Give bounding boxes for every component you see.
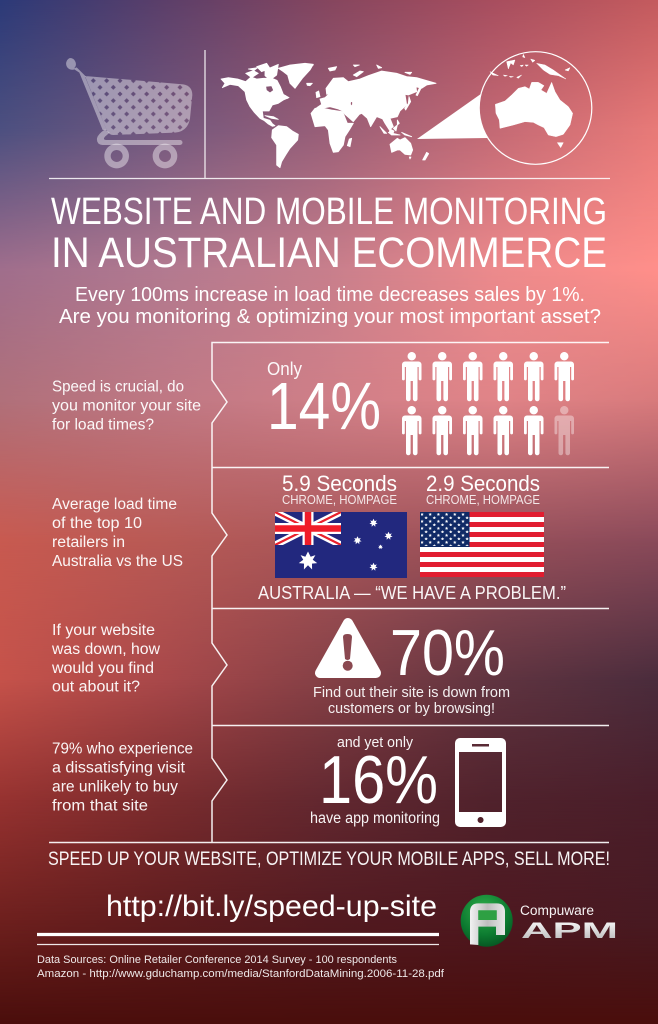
stat: 16% app monitoring: and yet only (337, 735, 414, 751)
stat: only 14%: Only (267, 359, 302, 379)
icon: magnifier circle (479, 52, 592, 164)
question: site down: out about it? (52, 678, 140, 696)
stat: Australia load time: CHROME, HOMPAGE (282, 492, 397, 507)
question: dissatisfying visit: 79% who experience (52, 740, 193, 758)
question: dissatisfying visit: from that site (52, 798, 148, 814)
question: dissatisfying visit (52, 740, 193, 814)
timeline spine with chevrons (49, 342, 609, 842)
icon: warning triangle (320, 623, 376, 673)
logo: Compuware APM: APM (521, 918, 618, 943)
url underline (37, 933, 439, 936)
subtitle: Every 100ms increase in load time decreases sales by 1%. (75, 283, 585, 306)
data sources: Data Sources: Online Retailer Conference 2014 Survey - 100 respondents (37, 954, 397, 966)
question: load time monitoring: Speed is crucial, do (52, 378, 184, 396)
data sources: Amazon - http://www.gduchamp.com/media/StanfordDataMining.2006-11-28.pdf (37, 968, 445, 980)
header divider (49, 50, 610, 178)
flag: Australia (275, 512, 407, 578)
stat: 70%: 70% (390, 616, 505, 689)
question: dissatisfying visit: are unlikely to buy (52, 778, 178, 796)
stat: US load time: 2.9 Seconds (426, 471, 540, 496)
question: average load time (52, 496, 183, 570)
subtitle (59, 283, 601, 328)
question: load time monitoring: you monitor your site (52, 398, 201, 414)
question: site down: was down, how (51, 641, 161, 658)
icon: shopping cart (66, 58, 192, 168)
title: IN AUSTRALIAN ECOMMERCE (51, 229, 607, 277)
map: Americas (221, 63, 313, 168)
stat: only 14%: 14% (267, 369, 381, 444)
stat: 16% app monitoring: have app monitoring (310, 810, 440, 827)
question: average load time: retailers in (52, 534, 125, 551)
logo: Compuware APM: Compuware (520, 903, 594, 918)
subtitle: Are you monitoring & optimizing your most important asset? (59, 305, 601, 328)
map: callout pointer (417, 94, 488, 139)
question: site down: If your website (52, 622, 155, 639)
icon: world map (221, 54, 573, 168)
map: Australia close-up (490, 54, 573, 148)
title (51, 191, 607, 277)
stat: US load time (426, 471, 540, 507)
question: load time monitoring (52, 378, 201, 434)
map: Eurasia, Africa, Oceania (310, 64, 436, 160)
stat caption: find out (313, 685, 510, 717)
stat: US load time: CHROME, HOMPAGE (426, 492, 540, 507)
question: average load time: Average load time (52, 496, 177, 513)
question: site down: would you find (51, 660, 154, 677)
callout: we have a problem: AUSTRALIA — “WE HAVE A PROBLEM.” (258, 583, 566, 603)
stat caption: find out: Find out their site is down from (313, 685, 510, 701)
pictogram: people (402, 352, 574, 455)
question: average load time: Australia vs the US (52, 553, 183, 570)
question: site down (51, 622, 161, 696)
icon: smartphone (455, 738, 506, 827)
question: load time monitoring: for load times? (52, 416, 154, 434)
stat: Australia load time: 5.9 Seconds (282, 471, 397, 496)
stat: 16% app monitoring: 16% (319, 742, 438, 818)
question: dissatisfying visit: a dissatisfying visit (52, 760, 186, 776)
flag: United States (420, 512, 544, 577)
data sources (37, 954, 445, 980)
logo: Compuware APM (461, 895, 618, 947)
question: average load time: of the top 10 (52, 515, 142, 532)
link url: http://bit.ly/speed-up-site (106, 890, 437, 923)
stat caption: find out: customers or by browsing! (328, 701, 495, 717)
stat: Australia load time (282, 471, 397, 507)
